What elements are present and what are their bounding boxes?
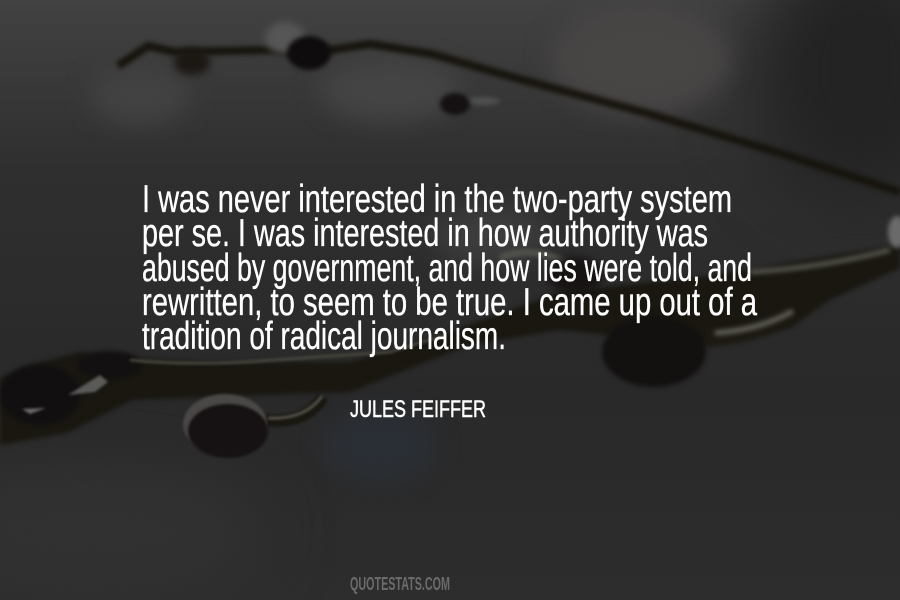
top branch with buds [118,22,900,192]
quote text: per se. I was interested in how authority was [142,212,708,255]
watermark: QUOTESTATS.COM [350,574,450,594]
author name: JULES FEIFFER [350,396,486,423]
small hanging bud [183,394,323,458]
quote text [142,178,757,358]
large dark bud [602,311,793,387]
quote text: tradition of radical journalism. [142,315,506,358]
lower branch with buds [0,216,900,445]
